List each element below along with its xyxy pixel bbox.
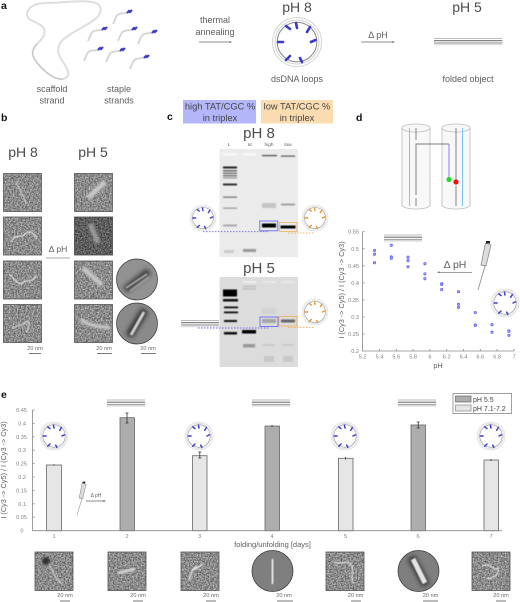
scale bars panel b	[27, 346, 156, 354]
icon: orange loop gel pH 5	[302, 299, 328, 325]
arrow: delta pH scatter	[437, 271, 472, 273]
panel c label: c	[167, 111, 173, 123]
scatter chart: 0.25	[348, 332, 359, 338]
icons: folded objects above bars	[107, 400, 436, 408]
lane labels	[228, 142, 292, 148]
bar chart: 1	[52, 534, 56, 540]
gel pH 5	[220, 277, 298, 367]
scatter chart: 0.4	[351, 281, 359, 287]
scatter chart: 6.2	[443, 354, 451, 360]
y axis label: I (Cy3 -> Cy5) / I (Cy3 -> Cy3)	[337, 241, 346, 339]
scatter chart: 5.8	[409, 354, 417, 360]
icon: pipette bars	[77, 482, 86, 515]
schematic: two helices with FRET dyes	[402, 124, 470, 209]
bar chart: 0.2	[18, 475, 26, 481]
bar chart: 0.1	[18, 502, 26, 508]
icon: folded object	[434, 38, 502, 46]
scaffold strand	[27, 1, 101, 79]
scale bars row e: 20 nm	[423, 593, 439, 599]
legend: pH 7.1-7.2	[473, 406, 506, 413]
heading pH 8: pH 8	[8, 144, 38, 160]
scatter chart: 5.2	[359, 354, 367, 360]
panel a label: a	[1, 0, 7, 12]
bar chart: 0.15	[16, 488, 27, 494]
delta pH label: Δ pH	[368, 30, 388, 40]
class average 2	[116, 303, 158, 344]
arrow: delta pH bars	[86, 500, 106, 502]
icon: pipette scatter	[478, 241, 491, 290]
delta pH label: Δ pH	[49, 244, 67, 254]
scatter chart: 0.35	[348, 298, 359, 304]
arrow: delta pH	[361, 41, 395, 43]
bar chart: 0.35	[16, 435, 27, 441]
scale bars row e: 20 nm	[203, 593, 219, 599]
staple strands label: strands	[104, 96, 134, 106]
legend: high TAT/CGC: in triplex	[203, 113, 238, 123]
scale bars row e	[57, 593, 509, 601]
micrograph row	[35, 550, 510, 592]
scatter chart: 5.6	[392, 354, 400, 360]
scale bars row e: 20 nm	[493, 593, 509, 599]
arrow: delta pH	[46, 257, 70, 259]
legend	[453, 394, 512, 414]
scatter chart: 6.4	[460, 354, 467, 360]
delta pH label bars: Δ pH	[91, 493, 102, 499]
legend: low TAT/CGC	[261, 100, 333, 124]
heading pH 5: pH 5	[78, 144, 108, 160]
staple strands	[84, 10, 157, 69]
bar chart: 0.05	[16, 515, 27, 521]
bar chart: 7	[489, 534, 493, 540]
scale bars panel b: 20 nm	[27, 346, 43, 352]
guide lines gel pH 8	[203, 232, 315, 233]
delta pH label scatter: Δ pH	[444, 259, 466, 271]
icon: orange loop gel pH 8	[302, 205, 328, 231]
lane labels: low	[284, 142, 292, 148]
scatter chart: pH	[433, 361, 443, 370]
legend: low TAT/CGC: low TAT/CGC %	[264, 102, 330, 112]
scale bars row e: 20 nm	[57, 593, 73, 599]
legend: high TAT/CGC: high TAT/CGC %	[185, 102, 255, 112]
legend: high TAT/CGC	[183, 100, 256, 124]
heading pH 8 gel: pH 8	[243, 125, 275, 142]
scatter chart: 6.8	[493, 354, 501, 360]
icon: folded object scatter	[384, 234, 422, 242]
bar chart: 2	[125, 534, 129, 540]
bar chart: 0.3	[18, 448, 26, 454]
icon: blue loop gel pH 8	[190, 205, 216, 231]
scatter chart: 5.4	[376, 354, 383, 360]
bar chart: 4	[270, 534, 274, 540]
guide lines gel pH 5	[198, 326, 315, 329]
bar chart: 3	[198, 534, 201, 540]
lane labels: high	[264, 142, 274, 148]
scale bars panel b: 20 nm	[96, 346, 112, 352]
panel e label: e	[1, 389, 7, 401]
bar chart: 5	[344, 534, 347, 540]
scatter chart: 0.45	[348, 264, 359, 270]
scale bars row e: 20 nm	[130, 593, 146, 599]
scatter chart: 0.2	[351, 349, 359, 355]
icons: loops above bars	[40, 422, 505, 450]
scatter chart: 6	[428, 354, 431, 360]
panel b label: b	[1, 112, 7, 124]
gel pH 8	[220, 149, 298, 257]
scatter chart: 7	[512, 354, 516, 360]
icon: folded object gel pH 5	[181, 320, 219, 328]
scaffold strand label: scaffold	[37, 84, 67, 94]
class average 1	[116, 259, 158, 300]
scatter chart: 0.5	[351, 247, 359, 253]
thermal annealing label: thermal	[200, 15, 230, 25]
bar chart: 6	[416, 534, 420, 540]
bar chart: 0.45	[16, 408, 27, 414]
scale bars row e: 20 nm	[348, 593, 364, 599]
icon: loop scatter	[491, 289, 519, 317]
thermal annealing label: annealing	[195, 27, 235, 37]
scatter chart: 6.6	[476, 354, 484, 360]
bar chart: 0.25	[16, 462, 27, 468]
scale bars row e: 20 nm	[276, 593, 292, 599]
staple strands label: staple	[107, 84, 131, 94]
icon: dsDNA loop	[272, 18, 322, 66]
scale bars panel b: 20 nm	[140, 346, 156, 352]
heading pH 5 gel: pH 5	[243, 260, 275, 277]
lane labels: L	[228, 142, 231, 148]
micrographs pH 5 column	[74, 174, 112, 342]
scaffold strand label: strand	[39, 96, 65, 106]
scatter chart: 0.55	[348, 230, 359, 236]
bar chart: folding/unfolding [days]	[234, 540, 311, 549]
legend: low TAT/CGC: in triplex	[280, 113, 315, 123]
bar chart: 0.4	[18, 421, 26, 427]
bar chart: 0	[20, 529, 24, 535]
micrographs pH 8 column	[4, 174, 42, 342]
folded object label: folded object	[442, 74, 494, 84]
panel d label: d	[356, 112, 362, 124]
arrow: annealing	[199, 41, 232, 43]
scatter chart: 0.3	[351, 315, 359, 321]
bar chart	[0, 408, 502, 549]
lane labels: sc	[248, 143, 253, 148]
scatter chart	[337, 230, 516, 370]
legend: pH 5.5	[473, 397, 494, 404]
dsDNA loops label: dsDNA loops	[271, 74, 324, 84]
